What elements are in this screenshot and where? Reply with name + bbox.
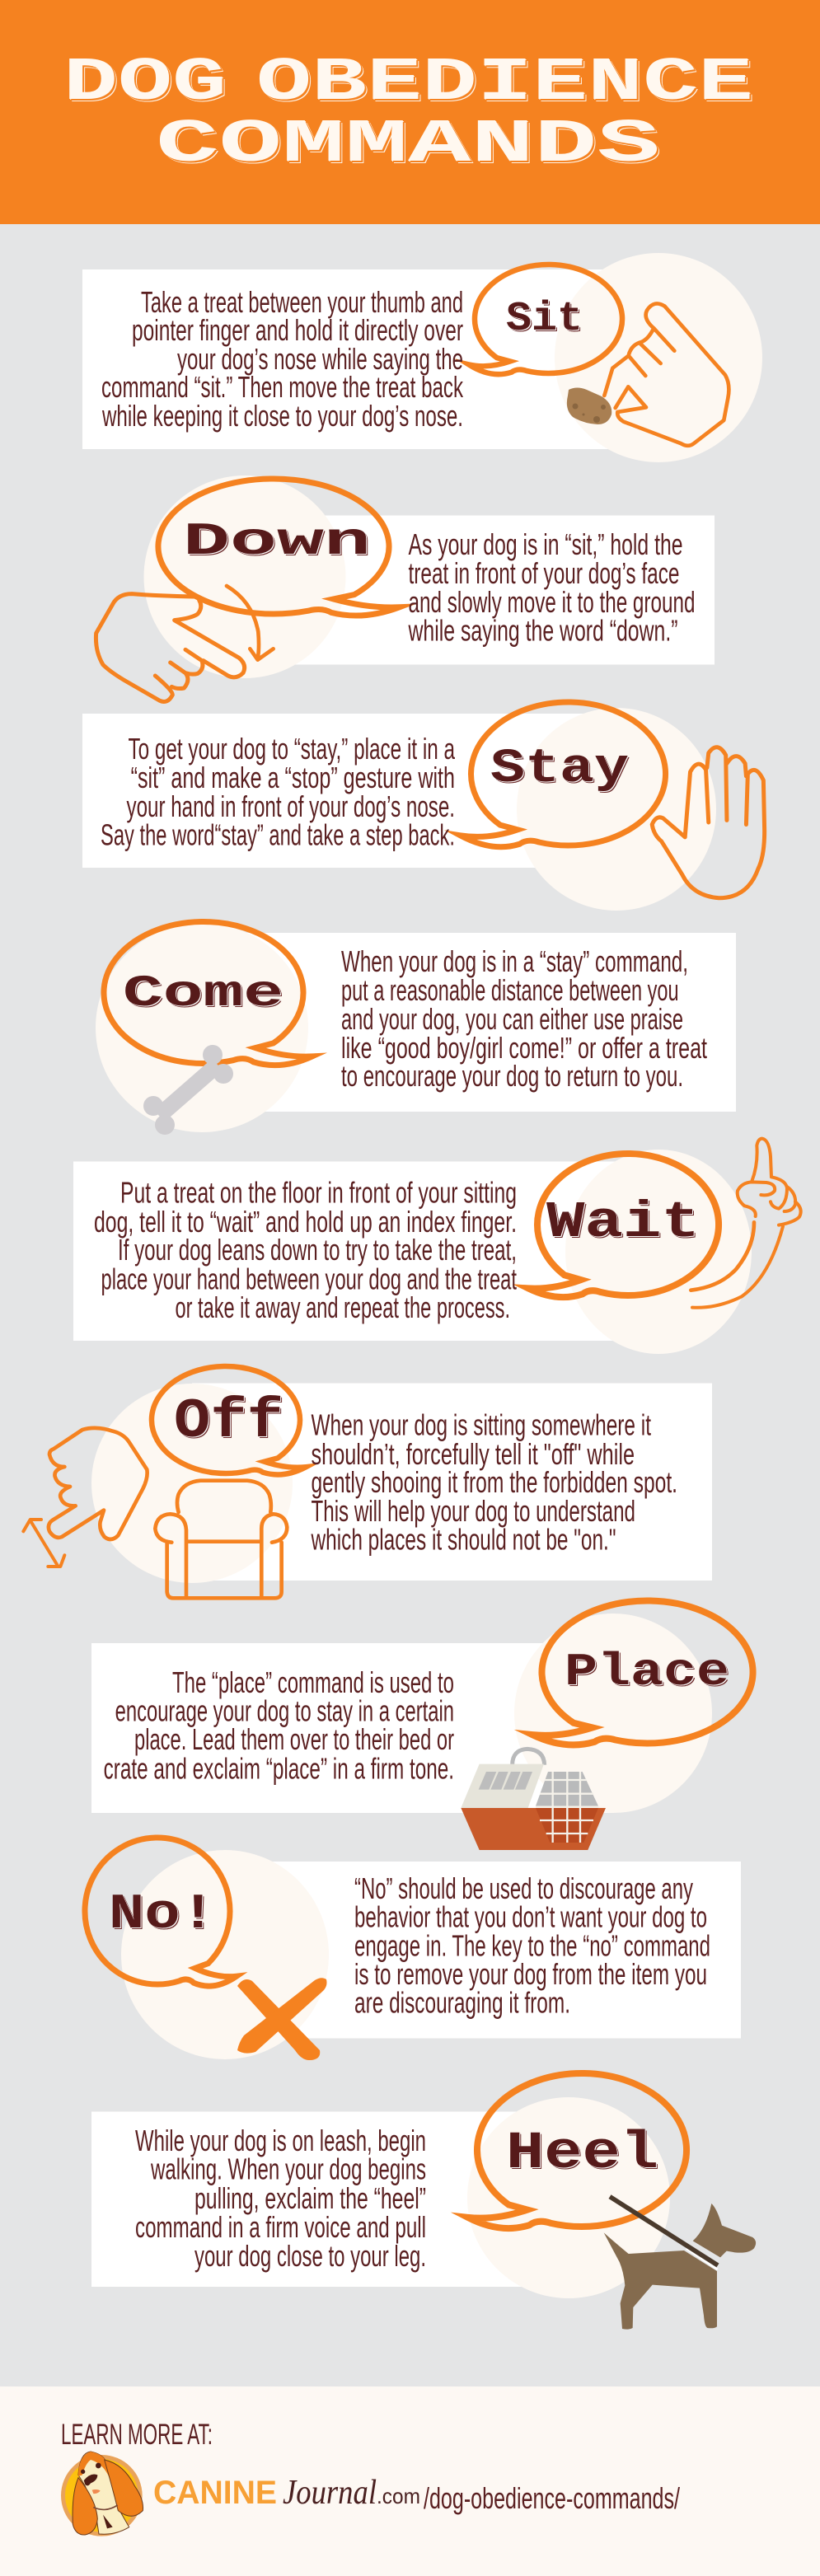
label: Sit: Sit bbox=[506, 296, 583, 343]
speech bubble: Down bbox=[158, 479, 400, 616]
text: Off instructions bbox=[311, 1408, 677, 1557]
label: Wait: Wait bbox=[546, 1193, 700, 1252]
panel: No bbox=[85, 1838, 741, 2060]
icon: stop hand bbox=[652, 747, 765, 898]
speech bubble: Wait bbox=[528, 1154, 719, 1297]
arrow: double-headed bbox=[23, 1520, 64, 1567]
text: url path: /dog-obedience-commands/ bbox=[424, 2481, 680, 2515]
text: Wait instructions: If your dog leans down to try to take the treat, bbox=[118, 1233, 517, 1267]
text: Place instructions bbox=[104, 1665, 454, 1786]
icon: bone bbox=[143, 1045, 233, 1135]
speech bubble: No bbox=[85, 1838, 237, 1986]
panel: Sit bbox=[82, 253, 762, 462]
text: Come instructions bbox=[341, 944, 707, 1093]
panel: Heel bbox=[91, 2073, 756, 2330]
speech bubble: Sit bbox=[469, 265, 622, 374]
text: Stay instructions: To get your dog to “stay,” place it in a bbox=[129, 732, 456, 766]
text: Down instructions: As your dog is in “sit,” hold the bbox=[409, 527, 682, 561]
label: Place: Place bbox=[565, 1646, 729, 1698]
text: Sit instructions: command “sit.” Then move the treat back bbox=[101, 370, 464, 404]
footer bbox=[0, 2386, 820, 2576]
text: Heel instructions: pulling, exclaim the “heel” bbox=[194, 2181, 426, 2215]
text: Off instructions: shouldn’t, forcefully tell it "off" while bbox=[312, 1437, 635, 1471]
panel: Place bbox=[91, 1601, 753, 1850]
logo wordmark: Canine Journal: .com bbox=[377, 2484, 420, 2508]
title: OBEDIENCE bbox=[256, 49, 753, 118]
label: Stay: Stay bbox=[490, 742, 629, 796]
text: Wait instructions: Put a treat on the floor in front of your sitting bbox=[120, 1176, 517, 1210]
text: Place instructions: The “place” command is used to bbox=[172, 1665, 454, 1699]
icon: pet crate bbox=[461, 1749, 606, 1850]
logo wordmark: Canine Journal: CANINE bbox=[153, 2475, 277, 2511]
text: Place instructions: crate and exclaim “place” in a firm tone. bbox=[104, 1752, 454, 1786]
text: Stay instructions: your hand in front of your dog’s nose. bbox=[127, 789, 455, 823]
speech bubble: Off bbox=[152, 1366, 306, 1474]
text: Stay instructions: “sit” and make a “stop” gesture with bbox=[131, 761, 455, 794]
label: No: No! bbox=[109, 1887, 216, 1943]
text: Place instructions: place. Lead them over to their bed or bbox=[134, 1722, 454, 1756]
text: Wait instructions bbox=[94, 1176, 517, 1324]
logo: basset hound bbox=[61, 2452, 143, 2536]
text: Off instructions: which places it should not be "on." bbox=[311, 1523, 616, 1557]
text: Stay instructions: Say the word“stay” and take a step back. bbox=[101, 817, 455, 852]
title: COMMANDS bbox=[156, 110, 660, 180]
icon: pointing hand bbox=[96, 594, 245, 701]
text: Sit instructions: pointer finger and hold it directly over bbox=[132, 313, 463, 347]
text: Heel instructions: your dog close to your leg. bbox=[194, 2239, 426, 2273]
title bbox=[63, 49, 753, 180]
text: Sit instructions bbox=[101, 285, 464, 433]
text: Heel instructions: command in a firm voice and pull bbox=[135, 2210, 426, 2244]
speech bubble: Stay bbox=[461, 702, 666, 847]
icon: dog on leash bbox=[604, 2197, 756, 2330]
icon: hand holding treat bbox=[604, 303, 729, 446]
panel: Come bbox=[96, 922, 736, 1135]
text: No instructions bbox=[354, 1871, 710, 2019]
text: Sit instructions: your dog’s nose while saying the bbox=[177, 342, 463, 376]
label: Down: Down bbox=[183, 515, 371, 568]
icon: pointing hand bbox=[49, 1428, 148, 1539]
text: Down instructions: treat in front of your dog’s face bbox=[409, 556, 679, 590]
text: Heel instructions: walking. When your dog begins bbox=[150, 2152, 426, 2185]
icon: treat bbox=[567, 387, 611, 424]
text: Heel instructions bbox=[135, 2124, 426, 2273]
text: Off instructions: This will help your dog to understand bbox=[312, 1494, 635, 1528]
icon: armchair bbox=[155, 1481, 287, 1598]
text: Stay instructions bbox=[101, 732, 456, 852]
icon: raised index finger bbox=[691, 1139, 801, 1308]
title: DOG bbox=[63, 49, 227, 118]
panel: Stay bbox=[82, 702, 765, 911]
label: Come: Come bbox=[123, 969, 283, 1019]
text: Down instructions: while saying the word “down.” bbox=[408, 613, 677, 648]
label: Off: Off bbox=[174, 1390, 283, 1454]
text: Off instructions: When your dog is sitting somewhere it bbox=[312, 1408, 651, 1442]
text: Sit instructions: while keeping it close to your dog’s nose. bbox=[101, 399, 463, 433]
panel: Off bbox=[23, 1366, 712, 1598]
logo wordmark: Canine Journal bbox=[153, 2474, 420, 2512]
text: Down instructions bbox=[408, 527, 696, 648]
panel: Wait bbox=[73, 1139, 801, 1354]
text: learn more: LEARN MORE AT: bbox=[61, 2419, 213, 2451]
arrow: down bbox=[227, 586, 274, 660]
panel: Down bbox=[96, 475, 715, 701]
icon: X mark bbox=[237, 1978, 326, 2060]
text: Heel instructions: While your dog is on leash, begin bbox=[135, 2124, 426, 2157]
logo wordmark: Canine Journal: Journal bbox=[283, 2474, 377, 2512]
text: Sit instructions: Take a treat between your thumb and bbox=[141, 285, 463, 319]
speech bubble: Heel bbox=[468, 2073, 686, 2228]
text: Wait instructions: place your hand between your dog and the treat bbox=[101, 1262, 517, 1295]
speech bubble: Come bbox=[104, 922, 312, 1066]
text: Wait instructions: dog, tell it to “wait” and hold up an index finger. bbox=[94, 1205, 517, 1239]
text: Wait instructions: or take it away and repeat the process. bbox=[175, 1290, 510, 1324]
text: Place instructions: encourage your dog to stay in a certain bbox=[115, 1694, 454, 1727]
header banner bbox=[0, 0, 820, 224]
label: Heel: Heel bbox=[506, 2124, 658, 2184]
text: No instructions: are discouraging it from. bbox=[354, 1986, 570, 2019]
speech bubble: Place bbox=[532, 1601, 753, 1745]
